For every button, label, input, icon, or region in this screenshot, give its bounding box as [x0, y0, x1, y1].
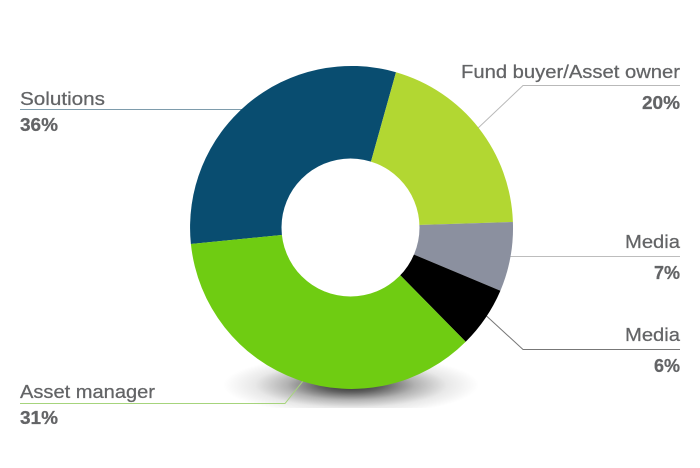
donut chart: [190, 66, 513, 389]
leader line: Fund buyer: [476, 86, 680, 130]
label: Media 6%: [625, 324, 681, 376]
segment: Media 7%: [351, 222, 513, 291]
donut hole: [282, 158, 420, 296]
pie shadow: [235, 366, 467, 408]
label: Solutions: [20, 88, 105, 135]
leader line: Media 6%: [480, 310, 680, 350]
leader line: Media 7%: [505, 256, 680, 258]
label: Solutions: 36%: [20, 115, 58, 135]
label: Fund buyer/Asset owner: [461, 61, 680, 113]
leader line: Asset manager: [20, 376, 307, 404]
label: Solutions: Solutions: [20, 88, 105, 109]
label: Asset manager: Asset manager: [20, 381, 155, 402]
label: Asset manager: 31%: [20, 408, 58, 428]
label: Media 6%: 6%: [654, 356, 680, 376]
label: Fund buyer/Asset owner: Fund buyer/Asset owner: [461, 61, 680, 82]
label: Media 6%: Media: [625, 324, 681, 345]
label: Media 7%: 7%: [654, 263, 680, 283]
label: Asset manager: [20, 381, 155, 428]
label: Media 7%: Media: [625, 231, 681, 252]
donut infographic: [20, 64, 680, 424]
label: Media 7%: [625, 231, 681, 283]
leader line: Solutions: [20, 108, 250, 110]
segment: Media 6%: [351, 228, 500, 342]
segment: Solutions 36%: [190, 66, 396, 244]
label: Fund buyer/Asset owner: 20%: [642, 93, 680, 113]
segment: Fund buyer/Asset owner 20%: [351, 72, 513, 228]
segment: Asset manager 31%: [191, 228, 466, 389]
